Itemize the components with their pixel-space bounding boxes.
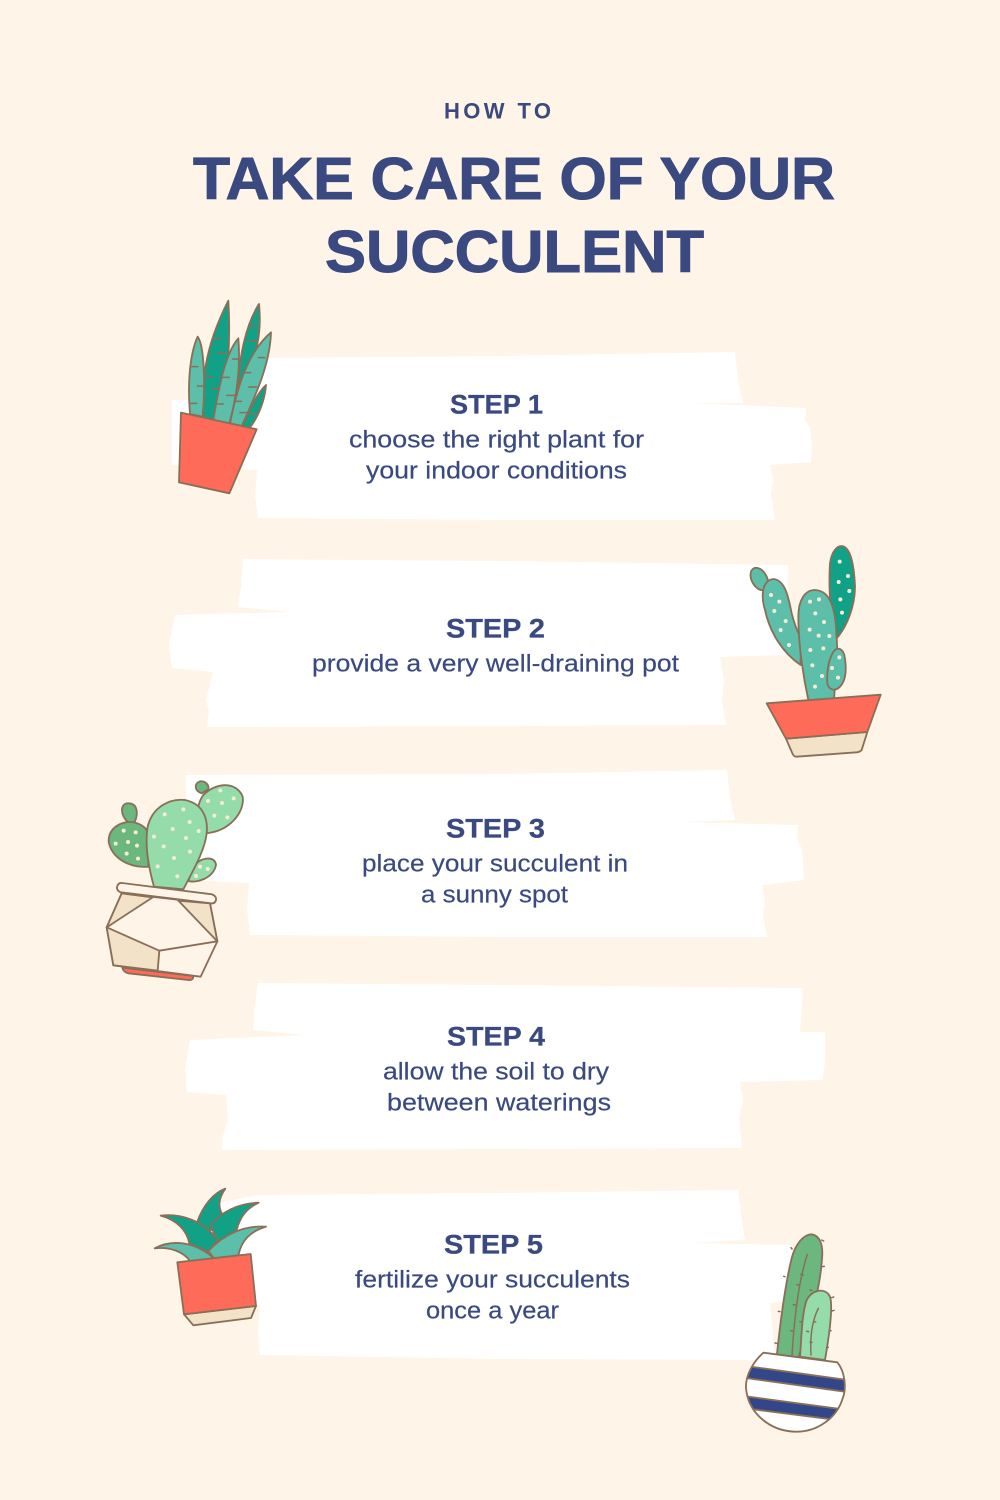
icon: tall cactus in striped round pot bbox=[743, 1234, 850, 1432]
step 1 text bbox=[349, 390, 644, 484]
step 4 text: between waterings bbox=[387, 1090, 611, 1116]
step 4 text: STEP 4 bbox=[447, 1022, 545, 1052]
step 3 text bbox=[362, 814, 628, 908]
panel: step 3 bbox=[186, 770, 804, 937]
step 2 text: provide a very well-draining pot bbox=[312, 650, 679, 678]
eyebrow: how to: HOW TO bbox=[444, 98, 551, 124]
icon: teal cactus in red pot bbox=[747, 546, 881, 757]
icon: snake plant in red pot bbox=[179, 301, 271, 493]
icon: prickly pear in geometric pot bbox=[107, 781, 243, 980]
step 3 text: STEP 3 bbox=[446, 814, 545, 844]
brush stroke 2 bbox=[169, 559, 788, 727]
step 2 text bbox=[312, 614, 679, 678]
title: TAKE CARE OF YOUR bbox=[193, 146, 835, 212]
step 1 text: your indoor conditions bbox=[366, 458, 627, 484]
step 5 text: fertilize your succulents bbox=[355, 1266, 630, 1294]
step 3 text: place your succulent in bbox=[362, 850, 628, 878]
panel: step 1 bbox=[172, 352, 812, 520]
title bbox=[193, 146, 835, 285]
title: SUCCULENT bbox=[325, 219, 704, 285]
step 1 text: STEP 1 bbox=[450, 390, 543, 420]
step 5 text: STEP 5 bbox=[444, 1230, 543, 1260]
step 5 text: once a year bbox=[426, 1298, 559, 1324]
step 5 text bbox=[355, 1230, 630, 1324]
step 2 text: STEP 2 bbox=[446, 614, 545, 644]
brush stroke 3 bbox=[186, 770, 804, 937]
brush stroke 5 bbox=[210, 1190, 800, 1360]
step 4 text: allow the soil to dry bbox=[383, 1058, 609, 1086]
panel: step 2 bbox=[169, 559, 788, 727]
brush stroke 4 bbox=[185, 983, 825, 1150]
icon: agave in red pot bbox=[155, 1189, 266, 1325]
panel: step 5 bbox=[210, 1190, 800, 1360]
panel: step 4 bbox=[185, 983, 825, 1150]
step 1 text: choose the right plant for bbox=[349, 426, 644, 454]
step 4 text bbox=[383, 1022, 611, 1116]
step 3 text: a sunny spot bbox=[421, 882, 568, 908]
brush stroke 1 bbox=[172, 352, 812, 520]
